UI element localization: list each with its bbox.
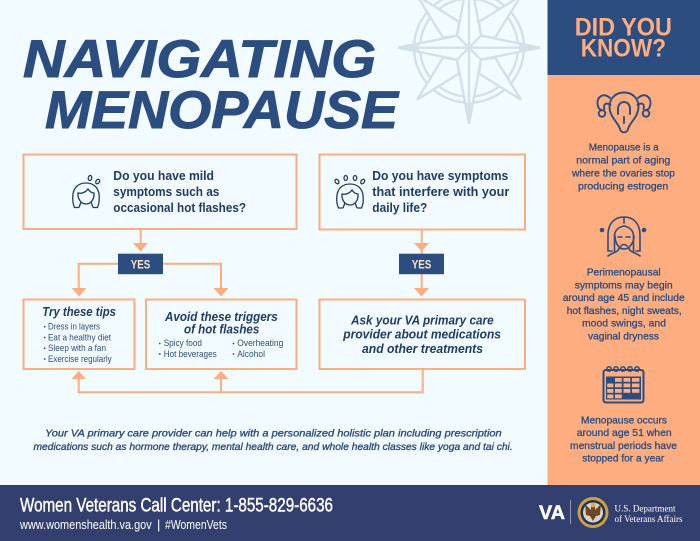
panel: ask your provider: Ask your VA primary care	[350, 313, 494, 327]
yes label left	[118, 254, 163, 274]
tips list: Dress in layers	[48, 322, 100, 332]
panel: ask your provider	[320, 300, 525, 369]
website and hashtag: www.womenshealth.va.gov	[19, 517, 152, 532]
fact: ovaries: normal part of aging	[576, 154, 670, 166]
icon: woman with two sweat drops	[73, 175, 101, 208]
fact: age 51: stopped for a year	[582, 453, 665, 465]
triggers list: Spicy food	[164, 338, 202, 348]
fact: ovaries: Menopause is a	[589, 142, 659, 154]
panel: avoid these triggers: of hot flashes	[184, 322, 259, 337]
icon: department seal	[578, 497, 608, 528]
triggers list	[159, 338, 283, 359]
sidebar heading: KNOW?	[581, 34, 666, 62]
question text: Do you have symptoms	[372, 168, 508, 183]
triggers list: Overheating	[237, 338, 283, 348]
fact: perimenopause: symptoms may begin	[575, 280, 673, 292]
question text	[372, 168, 509, 215]
yes label right	[399, 254, 444, 274]
holistic plan paragraph	[34, 428, 513, 453]
holistic plan paragraph: medications such as hormone therapy, mental health care, and whole health classes like yoga and tai chi.	[34, 441, 513, 453]
icon: woman with four sweat drops	[334, 176, 366, 208]
sidebar heading: DID YOU	[575, 14, 672, 42]
department name: of Veterans Affairs	[614, 514, 683, 525]
fact: age 51: Menopause occurs	[581, 414, 667, 426]
tips list	[44, 322, 112, 364]
fact: ovaries: producing estrogen	[578, 180, 668, 192]
fact: perimenopause: hot flashes, night sweats,	[567, 305, 682, 317]
panel: mild symptoms question	[24, 154, 296, 229]
title	[23, 30, 400, 140]
panel: interfering symptoms question	[320, 154, 525, 230]
yes label left: YES	[131, 257, 150, 271]
logo divider	[570, 500, 571, 524]
title: NAVIGATING	[23, 30, 376, 89]
fact: perimenopause: vaginal dryness	[588, 330, 659, 342]
question text: symptoms such as	[113, 184, 219, 199]
question text: daily life?	[372, 200, 427, 215]
tips list: Exercise regularly	[48, 354, 112, 364]
fact: perimenopause: Perimenopausal	[587, 267, 661, 279]
panel: ask your provider: provider about medications	[342, 328, 501, 342]
fact: ovaries	[571, 142, 675, 192]
panel: avoid these triggers: Avoid these triggers	[164, 309, 278, 324]
holistic plan paragraph: Your VA primary care provider can help with a personalized holistic plan including prescription	[45, 428, 502, 440]
fact: age 51: menstrual periods have	[570, 440, 677, 452]
website and hashtag: #WomenVets	[165, 517, 227, 532]
website and hashtag: |	[157, 517, 160, 532]
question text: Do you have mild	[113, 168, 214, 183]
panel: did you know sidebar	[548, 0, 700, 485]
flowchart connectors and arrows	[72, 229, 429, 392]
department name	[614, 505, 683, 525]
tips list: Sleep with a fan	[48, 343, 106, 353]
question text	[113, 168, 246, 215]
fact: perimenopause: mood swings, and	[582, 318, 666, 330]
triggers list: Hot beverages	[164, 349, 217, 359]
icon: uterus and ovaries	[597, 92, 651, 132]
fact: perimenopause: around age 45 and include	[563, 292, 685, 304]
sidebar heading	[575, 14, 672, 62]
fact: age 51: around age 51 when	[577, 427, 672, 439]
compass rose watermark	[398, 0, 540, 124]
department name: U.S. Department	[614, 505, 676, 515]
icon: calendar	[604, 367, 644, 402]
panel: ask your provider: and other treatments	[362, 342, 483, 356]
call center text: Women Veterans Call Center: 1-855-829-6636	[20, 496, 333, 517]
fact: ovaries: where the ovaries stop	[571, 168, 675, 180]
panel: try these tips	[24, 300, 134, 369]
icon: woman with symptoms	[600, 217, 646, 256]
panel: try these tips: Try these tips	[42, 304, 116, 319]
tips list: Eat a healthy diet	[48, 332, 111, 342]
triggers list: Alcohol	[237, 349, 265, 359]
VA logo: VA	[539, 503, 565, 524]
question text: occasional hot flashes?	[113, 200, 246, 215]
panel: avoid these triggers	[146, 300, 296, 369]
yes label right: YES	[412, 257, 431, 271]
fact: perimenopause	[563, 267, 685, 342]
footer band	[0, 485, 700, 541]
title: MENOPAUSE	[45, 81, 400, 140]
fact: age 51	[570, 414, 677, 465]
question text: that interfere with your	[372, 184, 509, 199]
